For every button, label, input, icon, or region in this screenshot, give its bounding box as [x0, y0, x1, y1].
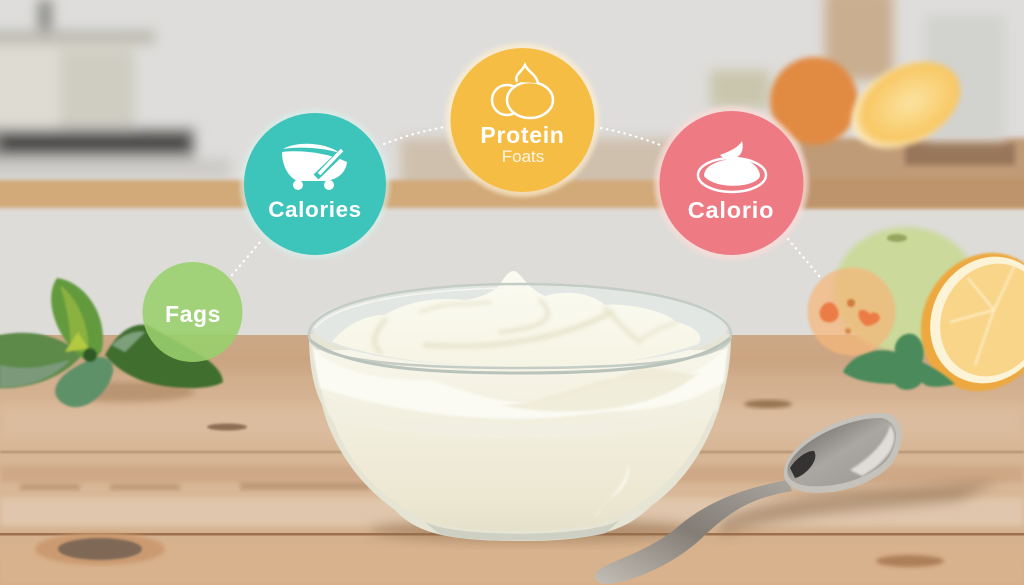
swirl creases: [375, 300, 676, 352]
circle: Calories: [240, 109, 390, 259]
yogurt inside bowl: [314, 350, 726, 531]
bowl glass body: [309, 309, 731, 541]
icon: eggs: [492, 65, 553, 118]
label: Calories: Calories: [268, 197, 362, 222]
blurred cooking pot and stove: [0, 0, 230, 178]
circle: orange fats icon: [808, 268, 896, 356]
kitchen wall background: [0, 0, 1024, 340]
dotted connector lines: [232, 127, 820, 277]
circle: Calorio: [654, 106, 808, 260]
glass ridge band: [322, 394, 720, 438]
label: Calorio: Calorio: [688, 197, 774, 223]
icon: orange spots: [820, 299, 880, 334]
bowl glass rim: [309, 284, 731, 368]
icon: bowl on wheels: [282, 144, 347, 190]
circle: Fags: [142, 262, 242, 362]
glass yogurt bowl: [309, 271, 731, 542]
mint sprig left: [0, 278, 223, 407]
circle: Protein: [446, 43, 600, 197]
yogurt swirl: [332, 271, 700, 368]
bowl contact shadow: [370, 518, 700, 542]
icon: yogurt blob: [698, 141, 766, 192]
label: Protein: Protein: [480, 122, 565, 148]
apple, orange half and mint right: [834, 227, 1024, 414]
bowl interior: [312, 285, 728, 367]
white frill behind rim: [312, 345, 728, 419]
leaf shadow: [55, 382, 195, 402]
metal spoon: [595, 413, 1000, 584]
wooden table: [0, 335, 1024, 585]
label: Foats: Foats: [502, 147, 544, 166]
label: Fags: Fags: [165, 301, 221, 327]
glass base reflection: [425, 520, 620, 540]
blurred fruit on the shelf: [710, 0, 1005, 166]
wooden shelf: [0, 138, 1024, 208]
